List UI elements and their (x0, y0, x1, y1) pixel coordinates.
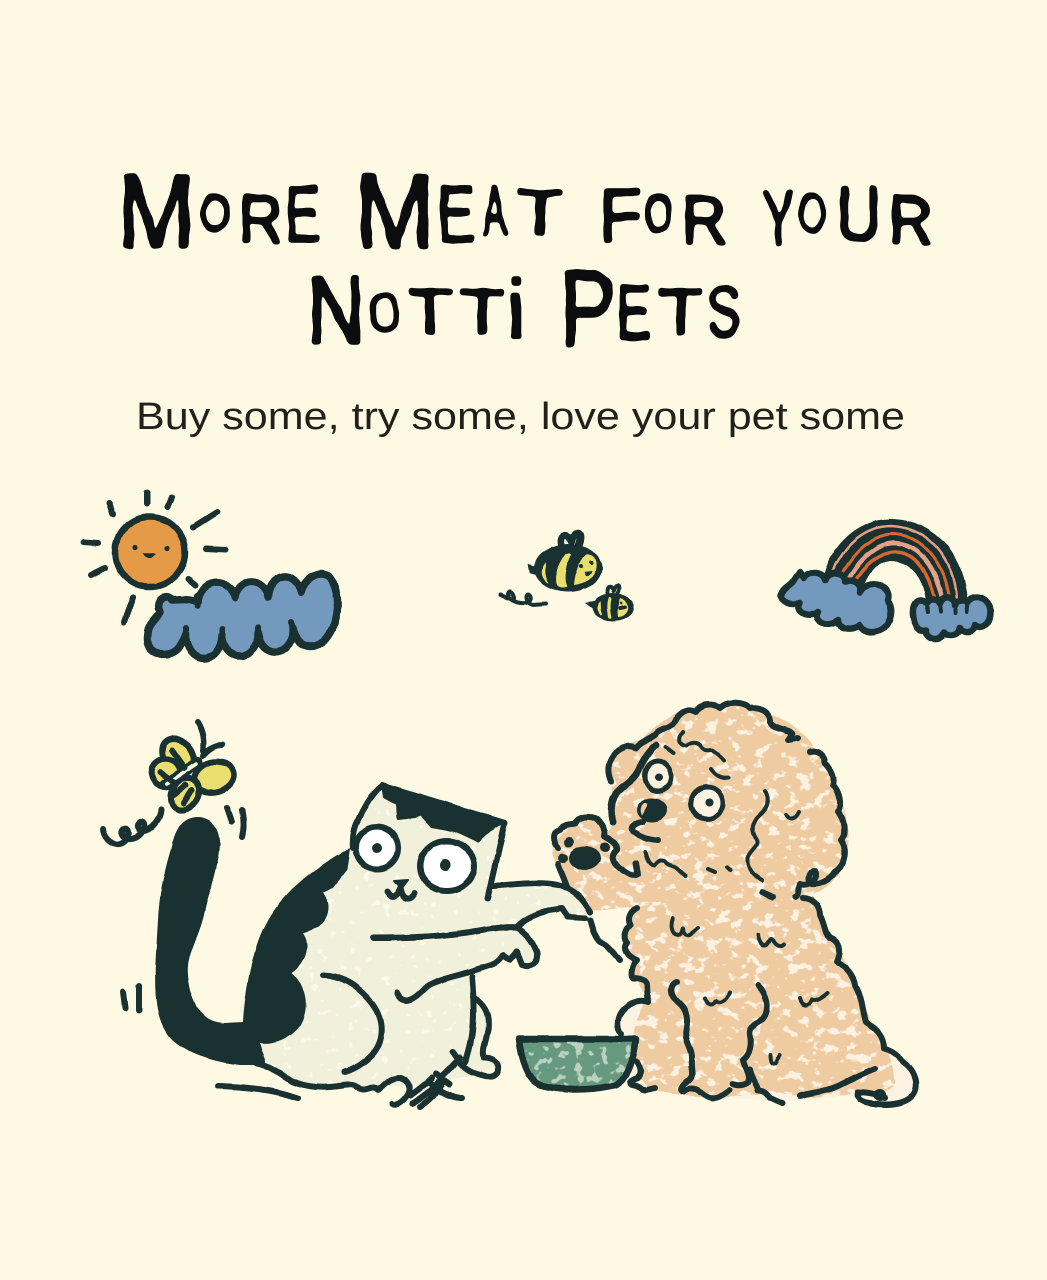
icon: rainbow with clouds (781, 526, 990, 639)
title: R (239, 180, 283, 257)
title: N (307, 256, 365, 363)
cat head outline (353, 785, 590, 912)
title: M (117, 152, 195, 271)
cat eyes (356, 827, 474, 891)
dog light underlay (552, 702, 916, 1100)
icon: sun (84, 493, 225, 622)
cat body fill (240, 787, 588, 1088)
icon: butterfly (103, 722, 237, 844)
title: T (459, 276, 505, 347)
ground line (218, 1086, 298, 1098)
title: R (681, 182, 727, 259)
title: F (599, 172, 642, 258)
cat haunch and legs (323, 975, 498, 1076)
icon: bees (500, 533, 634, 621)
dog raised paw (554, 817, 638, 887)
butterfly swirl (103, 810, 161, 844)
title: R (889, 181, 933, 258)
title: O (200, 184, 230, 242)
subtitle: Buy some, try some, love your pet some (136, 396, 905, 438)
cat arm lines (373, 908, 585, 1000)
dog (552, 702, 916, 1104)
cat body texture (240, 787, 588, 1088)
title: Y (762, 175, 795, 262)
title: O (370, 284, 400, 342)
title: E (437, 168, 475, 259)
left rainbow cloud (781, 572, 892, 632)
dog face squiggles (645, 733, 799, 880)
tail motion marks (123, 808, 244, 1010)
title: A (482, 173, 508, 252)
title: i (507, 262, 526, 356)
icon: cloud under sun (148, 574, 338, 658)
cat nose and mouth (387, 880, 415, 899)
title: T (658, 276, 703, 347)
cat (155, 785, 590, 1107)
dog nose and mouth (632, 798, 667, 840)
right rainbow cloud (913, 597, 990, 639)
title: O (644, 184, 673, 242)
cat tail and back patch (155, 817, 350, 1065)
title: T (408, 276, 453, 347)
title: E (616, 269, 651, 355)
cat head patch (382, 785, 505, 842)
title: M (355, 152, 435, 271)
dog head band (611, 745, 656, 822)
flight swirl (500, 591, 546, 605)
dog outline (608, 703, 798, 782)
illustration scene (84, 493, 990, 1107)
small bee (587, 585, 634, 621)
title: T (517, 176, 564, 250)
title (117, 152, 933, 369)
title: S (707, 273, 741, 352)
title: E (285, 168, 321, 259)
dog eyes (645, 761, 723, 819)
title: P (560, 247, 616, 369)
title: O (798, 184, 826, 243)
dog legs (672, 982, 730, 1098)
big bee (530, 533, 602, 592)
bowl (519, 1039, 636, 1090)
title: U (836, 170, 882, 257)
dog fur texture (552, 702, 895, 1098)
dog fur marks (672, 918, 828, 1064)
dog left body line (618, 908, 648, 1034)
cat belly and front paws (257, 1058, 462, 1107)
